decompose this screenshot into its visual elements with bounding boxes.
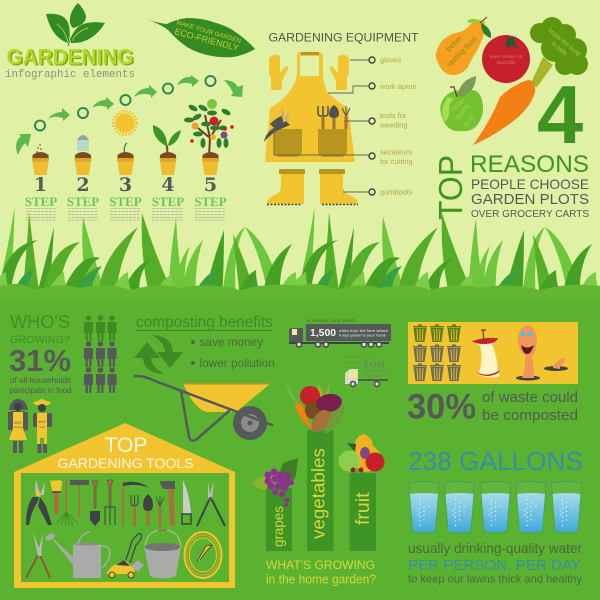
equipment labels: gloves [380, 56, 402, 64]
background: lower green panel right [300, 298, 600, 600]
composting benefit list: lower pollution [200, 356, 275, 370]
icon: small truck with 100 miles: less than [344, 361, 359, 365]
bar: vegetables: vegetables [308, 448, 328, 539]
step 4: seedling [153, 125, 181, 175]
icon: hand fork [131, 495, 138, 526]
step progress: rings and arrows [16, 75, 243, 155]
icon: vegetable pile [286, 384, 344, 433]
icon: lopping shears [26, 532, 50, 578]
who's growing stats: participate in food [10, 386, 72, 395]
step labels: STEP [67, 194, 99, 209]
stat: 30% waste: of waste could [482, 389, 578, 406]
top reasons heading: OVER GROCERY CARTS [471, 209, 589, 220]
icon: carrot [473, 80, 535, 145]
step labels: STEP [25, 194, 57, 209]
icon: small truck with 100 miles: miles to reach [364, 370, 388, 374]
icon: trowel [143, 494, 153, 526]
step labels: STEP [109, 194, 142, 209]
icon: pear: tasting food [445, 35, 479, 68]
equipment labels: for cutting [380, 157, 412, 166]
icon: rake [57, 479, 78, 526]
big number 4: 4 [537, 68, 583, 161]
step numbers: 5 [204, 174, 217, 196]
step 1: seeds in pot [32, 144, 49, 175]
people icon grid [84, 315, 116, 393]
heading: 238 gallons: 238 GALLONS [408, 446, 583, 476]
icon: tomato: food bills [497, 60, 516, 66]
title: gardening: GARDENING [8, 46, 135, 70]
panel: top gardening tools house: TOP [105, 434, 147, 457]
top reasons heading [432, 151, 589, 220]
bar: vegetables [307, 430, 334, 551]
top reasons heading: REASONS [470, 151, 589, 178]
step labels: STEP [152, 194, 184, 209]
icon: saw [182, 480, 191, 524]
icon: small truck with 100 miles: your table [364, 373, 382, 378]
icon: trash cans [413, 324, 461, 381]
step numbers [34, 174, 217, 196]
equipment labels [379, 56, 417, 196]
leaf banner: eco-friendly [146, 18, 255, 57]
equipment labels: work apron [379, 82, 417, 91]
icon: worm [516, 325, 568, 380]
icon: apple core [472, 330, 500, 378]
step numbers: 2 [76, 174, 90, 196]
icon: fruit pile [338, 434, 384, 472]
icon: apple: food [462, 114, 476, 129]
composting benefits heading: composting benefits [136, 314, 273, 331]
stat: 30% waste: be composted [482, 407, 578, 424]
who's growing stats: WHO'S [10, 312, 70, 332]
top reasons heading: GARDEN PLOTS [471, 191, 589, 208]
icon: garden hose [184, 532, 222, 578]
icon: big truck with 1,500 miles [289, 318, 391, 348]
step labels: STEP [194, 194, 227, 209]
panel: compost waste [408, 322, 578, 384]
icon: bucket [144, 529, 181, 578]
icon: gumboots [267, 169, 358, 204]
icon: hoe [70, 480, 89, 517]
bar: grapes [266, 488, 292, 551]
background: light sky [0, 0, 600, 300]
step 2: watering rain over pot [74, 135, 92, 175]
water usage text: usually drinking-quality water [408, 541, 582, 556]
water usage text: to keep our lawns thick and healthy [408, 574, 583, 586]
icon: hedge shears [197, 481, 225, 526]
icon: man farmer: men [39, 425, 45, 429]
who's growing stats [9, 312, 72, 395]
icon: lawn mower [106, 533, 144, 578]
icon: gloves [269, 54, 349, 90]
water usage text: PER PERSON, PER DAY [408, 557, 581, 574]
icon: wheelbarrow [135, 376, 272, 441]
caption: what's growing: in the home garden? [266, 572, 376, 586]
logo: gardening leaves [46, 3, 105, 46]
bar: fruit [350, 473, 376, 551]
icon: woman farmer: women [13, 425, 23, 429]
icon: secateurs [264, 108, 290, 142]
icon: scythe [122, 482, 149, 526]
who's growing stats: of all households [10, 376, 71, 385]
icon: tomato [482, 33, 530, 83]
icon: paint brush [50, 480, 62, 514]
who's growing stats: 31% [9, 343, 71, 378]
step placeholder text lines [26, 208, 225, 220]
top reasons heading: PEOPLE CHOOSE [471, 177, 589, 192]
icon: grapes [252, 458, 298, 507]
grass strip [0, 207, 600, 300]
icon: water glasses [409, 482, 582, 533]
icon: recycling arrows [134, 335, 183, 374]
icon: axe [160, 481, 175, 526]
caption: what's growing [266, 558, 376, 586]
icon: big truck with 1,500 miles: it was grown to your home [339, 334, 386, 338]
icon: apron pockets [274, 129, 347, 157]
icon: pitchfork [105, 480, 115, 525]
equipment labels: secateurs [380, 148, 412, 156]
subtitle: infographic elements [5, 69, 135, 81]
panel: top gardening tools house [14, 423, 235, 588]
icon: apple: quality [454, 101, 473, 121]
icon: pear [436, 17, 491, 75]
icon: apple [440, 76, 483, 131]
leader lines [274, 57, 375, 195]
icon: hand cultivator [156, 496, 164, 526]
icon: spade [90, 481, 100, 526]
composting benefit list [191, 335, 275, 370]
background: lower green panel [0, 298, 302, 600]
icon: man farmer: 46% [38, 420, 46, 424]
icon: broccoli [530, 17, 588, 87]
icon: pear: better [444, 33, 464, 53]
top reasons heading: TOP [432, 155, 469, 220]
icon: secateurs tool [26, 480, 52, 525]
icon: woman farmer [8, 399, 28, 453]
water usage text [408, 541, 583, 586]
icon: weeding tools [318, 105, 350, 129]
bar: fruit: fruit [352, 492, 374, 525]
equipment labels: weeding [379, 120, 408, 130]
icon: woman farmer: 54% [14, 421, 22, 425]
bar: grapes: grapes [271, 506, 286, 547]
step numbers: 3 [119, 174, 132, 196]
icon: big truck with 1,500 miles: miles from the farm where [339, 329, 388, 333]
panel: top gardening tools house: GARDENING TOOLS [58, 456, 194, 471]
equipment labels: gumboots [380, 188, 413, 196]
icon: apple: better [450, 97, 468, 114]
leaf banner: eco-friendly: MAKE YOUR GARDEN [175, 19, 242, 45]
icon: big truck with 1,500 miles: 1,500 [310, 327, 336, 339]
who's growing stats: GROWING? [10, 334, 70, 346]
icon: tomato: save money on [490, 55, 523, 60]
stat: 30% waste [407, 388, 578, 426]
step numbers: 4 [161, 174, 175, 196]
step numbers: 1 [34, 174, 47, 196]
step 3: sun and sprout [114, 112, 136, 175]
icon: small truck with 100 miles: 100 [362, 360, 385, 370]
step labels [25, 194, 227, 209]
icon: broccoli: is safe [550, 40, 569, 58]
caption: what's growing: WHAT'S GROWING [266, 558, 375, 572]
composting benefit list: save money [200, 335, 263, 349]
equipment labels: tools for [380, 111, 407, 120]
step 5: fruit tree [184, 99, 234, 175]
icon: small truck with 100 miles [344, 355, 388, 387]
stat: 30% waste: 30% [407, 388, 476, 426]
icon: big truck with 1,500 miles: on average, food travels [306, 318, 356, 323]
icon: work apron [265, 52, 355, 162]
icon: apron equipment [264, 52, 375, 204]
heading: gardening equipment: GARDENING EQUIPMENT [268, 30, 419, 44]
icon: broccoli: know the food [547, 27, 582, 58]
icon: small truck with 100 miles: local food travels [344, 355, 373, 359]
leaf banner: eco-friendly: ECO-FRIENDLY [173, 26, 240, 53]
title: gardening: GARDENING [6, 44, 134, 70]
icon: man farmer [33, 399, 52, 453]
icon: watering can [44, 532, 110, 578]
